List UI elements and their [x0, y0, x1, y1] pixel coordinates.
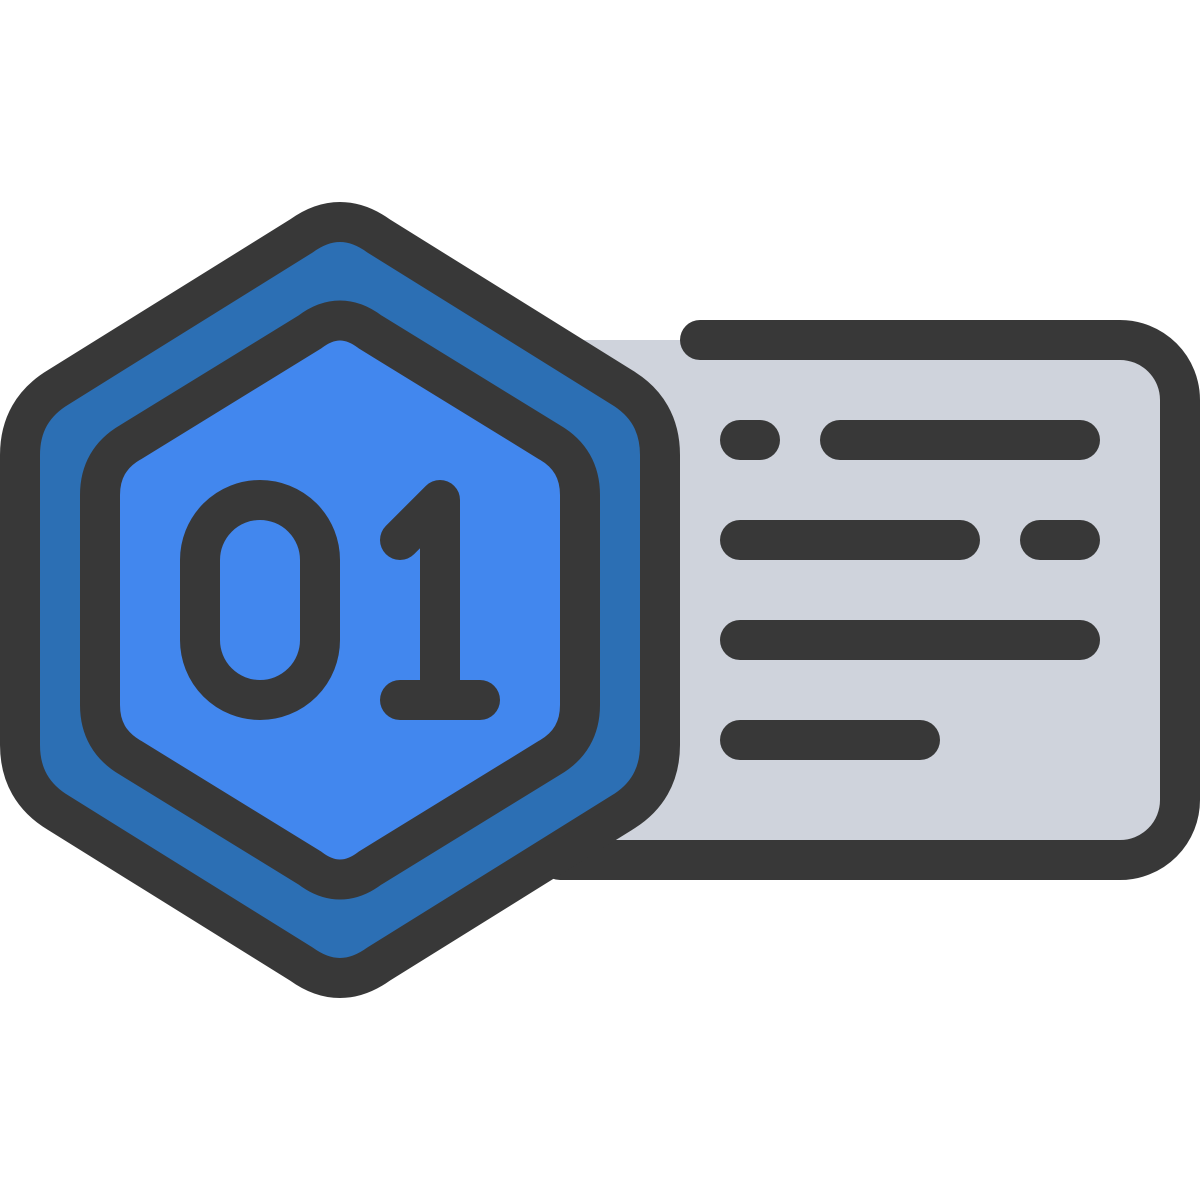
- card: [560, 340, 1180, 860]
- number 01: [200, 500, 480, 700]
- text lines: [740, 440, 1080, 740]
- hexagon badge: [20, 222, 660, 978]
